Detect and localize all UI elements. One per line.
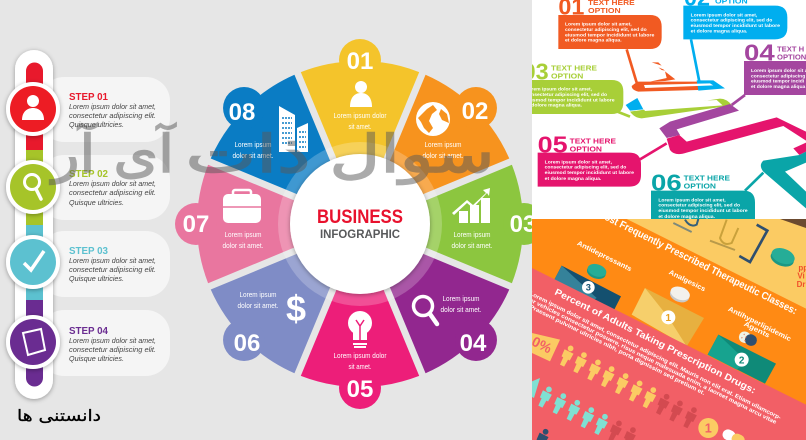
capsule bottom	[722, 429, 745, 440]
numbers: 07	[183, 211, 209, 238]
badge 1: 1	[705, 422, 712, 436]
watermark: آی آر	[49, 122, 177, 185]
option 06: Lorem ipsum dolor sit amet,	[658, 197, 726, 203]
body copy: Praesent pulvinar ultricies nibh, porta dignissim sed pretium et.	[528, 304, 706, 397]
option 06: TEXT HERE	[684, 173, 730, 182]
centre title: INFOGRAPHIC	[320, 227, 400, 241]
segment captions: Lorem ipsum	[454, 230, 490, 239]
segment captions: sit amet.	[348, 122, 372, 131]
text: red fragment: Dr	[797, 280, 806, 289]
option 04: TEXT H	[777, 45, 805, 54]
heading: percent of adults: Percent of Adults Taking Prescription Drugs:	[553, 287, 757, 395]
step 2 text: STEP 02	[69, 169, 108, 180]
icon: growth chart	[452, 188, 490, 223]
centre title: BUSINESS	[317, 207, 403, 228]
label: analgesics: Analgesics	[667, 269, 706, 293]
option 05: eiusmod tempor incididunt ut labore	[545, 170, 634, 176]
option 03	[532, 64, 624, 114]
option 01: OPTION	[588, 6, 621, 15]
timeline coloured bar	[26, 63, 43, 387]
step 4 text: Quisque ultricies.	[69, 354, 124, 363]
chart: business wheel	[175, 39, 545, 409]
label: antidepressants: Antidepressants	[576, 240, 633, 273]
option 04: Lorem ipsum dolor sit a	[751, 68, 806, 74]
option 03: eiusmod tempor incididunt ut labore	[525, 97, 615, 103]
pill teal	[586, 264, 606, 279]
option 05: Lorem ipsum dolor sit amet,	[545, 159, 613, 165]
segment captions: Lorem ipsum	[424, 140, 462, 149]
icon: magnifier	[414, 296, 437, 324]
envelope 2: 2	[739, 355, 745, 366]
numbers	[183, 48, 536, 403]
loop: orange and blue	[632, 80, 725, 92]
option 05: 05	[538, 131, 568, 157]
people row: muted red	[606, 392, 700, 440]
option 06: eiusmod tempor incididunt ut labore	[658, 208, 748, 214]
segment 07	[175, 165, 303, 283]
envelope 1	[632, 288, 704, 346]
segment captions: dolor sit amet.	[232, 151, 274, 160]
body copy: er vehicles consectetur posuere, risus neque malesuada enim, a laoreet magna arcu vitae	[528, 298, 777, 426]
step 2 text: Lorem ipsum dolor sit amet,	[69, 179, 156, 188]
numbers: 01	[347, 48, 373, 75]
option 02: et dolore magna aliqua.	[691, 28, 748, 34]
pill white	[670, 286, 690, 302]
option 06: consectetur adipiscing elit, sed do	[658, 203, 740, 209]
segment captions: Lorem ipsum	[240, 290, 276, 299]
badge 1	[698, 418, 718, 438]
option 03: consectetur adipiscing elit, sed do	[525, 92, 607, 98]
segment captions	[222, 111, 492, 371]
step cards	[40, 77, 170, 376]
label: antihyperlipidemic agents: Antihyperlipidemic	[727, 306, 792, 343]
option 04: et dolore magna aliqua	[751, 84, 806, 90]
segment 01	[301, 39, 419, 167]
loop: purple and magenta	[659, 104, 806, 154]
segment captions: Lorem ipsum dolor	[334, 111, 387, 120]
step 3 text	[69, 246, 156, 283]
translucent ring	[278, 142, 442, 306]
segment 03	[417, 165, 545, 283]
watermark	[49, 122, 494, 185]
banner: percentage: 0%	[529, 333, 555, 357]
option 03: TEXT HERE	[551, 63, 597, 72]
envelope 2	[708, 335, 776, 384]
step 4 text	[69, 326, 156, 363]
option 02: Lorem ipsum dolor sit amet,	[691, 12, 758, 18]
band: coral	[532, 268, 806, 440]
icon: person step 1	[6, 82, 60, 136]
icon: briefcase	[223, 190, 261, 223]
step 1 text: Quisque ultricies.	[69, 120, 124, 129]
option 02: consectetur adipiscing elit, sed do	[691, 18, 772, 24]
segment 02	[358, 51, 533, 226]
icon: buildings	[279, 106, 308, 152]
option 01: consectetur adipiscing elit, sed do	[565, 27, 647, 33]
panel background	[532, 0, 806, 219]
icon: light bulb	[348, 311, 372, 347]
label: antihyperlipidemic agents: Agents	[742, 321, 771, 340]
option 06: et dolore magna aliqua.	[658, 214, 716, 220]
envelope 3: 3	[586, 283, 591, 293]
option 05	[538, 131, 641, 187]
banner: percentage	[529, 333, 560, 361]
option 03: 03	[523, 59, 549, 85]
segment captions: dolor sit amet.	[422, 151, 464, 160]
segment captions: dolor sit amet.	[238, 301, 278, 310]
step 4 text: consectetur adipiscing elit.	[69, 345, 156, 354]
step 2 text: Quisque ultricies.	[69, 198, 124, 207]
panel: prescription drugs	[528, 209, 806, 440]
icon: top dark strip	[780, 219, 806, 228]
option 01: eiusmod tempor incididunt ut labore	[565, 32, 655, 38]
option 01: Lorem ipsum dolor sit amet,	[565, 22, 632, 28]
option 04: consectetur adipiscing	[751, 73, 805, 79]
option 01: et dolore magna aliqua.	[565, 38, 622, 44]
option 02: eiusmod tempor incididunt ut labore	[691, 23, 780, 29]
watermark: ذات	[186, 125, 310, 185]
loop: teal	[761, 143, 806, 208]
step 3 text: Lorem ipsum dolor sit amet,	[69, 256, 156, 265]
icon: globe	[416, 102, 450, 136]
numbers: 04	[460, 330, 487, 357]
step 3 text: consectetur adipiscing elit.	[69, 265, 156, 274]
numbers: 05	[347, 376, 373, 403]
step 3 text: STEP 03	[69, 246, 108, 257]
loop: blue and green	[626, 98, 732, 118]
option 06	[651, 169, 755, 220]
people row: teal	[538, 386, 608, 435]
option 02	[683, 0, 787, 39]
option 03: OPTION	[551, 71, 584, 80]
option 06: 06	[651, 169, 682, 195]
segment 08	[187, 51, 362, 226]
numbers: 08	[229, 99, 255, 126]
step 2 text	[69, 169, 156, 207]
option 05: consectetur adipiscing elit, sed do	[545, 165, 626, 171]
step 1 text: Lorem ipsum dolor sit amet,	[69, 102, 156, 111]
numbers: 06	[234, 330, 260, 357]
segment captions: sit amet.	[348, 362, 372, 371]
option 03: et dolore magna aliqua.	[525, 103, 583, 109]
icon: person	[350, 81, 372, 107]
icon: check step 3	[6, 235, 60, 289]
people row: yellow	[558, 344, 659, 409]
numbers: 02	[462, 98, 488, 125]
icon: dollar: $	[286, 288, 306, 329]
option 04: OPTION	[777, 53, 806, 62]
icon: orange marks	[650, 62, 675, 82]
step 4 text: Lorem ipsum dolor sit amet,	[69, 336, 156, 345]
connector lines	[617, 39, 763, 191]
option 04: eiusmod tempor incidi	[751, 79, 805, 85]
option 01	[558, 0, 662, 49]
segment 05	[301, 281, 419, 409]
option 05: et dolore magna aliqua.	[545, 176, 602, 182]
segment captions: Lorem ipsum dolor	[334, 351, 387, 360]
segment captions: dolor sit amet.	[222, 241, 264, 250]
envelope 1: 1	[666, 313, 672, 324]
capsule	[738, 332, 757, 346]
segment 06	[187, 222, 362, 397]
band: yellow	[626, 219, 806, 309]
centre disc	[290, 154, 430, 294]
option 05: OPTION	[570, 144, 603, 153]
band: orange	[532, 219, 806, 404]
step 1 text	[69, 92, 156, 129]
segment captions: dolor sit amet.	[452, 241, 492, 250]
segment captions: Lorem ipsum	[224, 230, 262, 239]
segment 04	[358, 222, 533, 397]
body copy: Lorem ipsum dolor sit amet, consectetur adipiscing elit. Mauris non elit erat. Etiam ullamcorp-	[528, 291, 782, 421]
text: red fragment	[797, 266, 806, 287]
option 03: Lorem ipsum dolor sit amet,	[525, 87, 593, 93]
numbers: 03	[510, 211, 536, 238]
caption: Persian label: دانستنی ها	[17, 406, 101, 425]
timeline pill	[15, 50, 53, 399]
option 04	[744, 40, 806, 95]
panel: vertical steps	[6, 50, 170, 399]
segment captions: dolor sit amet.	[440, 305, 482, 314]
step 1 text: consectetur adipiscing elit.	[69, 111, 156, 120]
envelope 3	[554, 266, 621, 310]
segment captions: Lorem ipsum	[442, 294, 480, 303]
icon: teal pill top	[770, 248, 795, 267]
option 06: OPTION	[684, 181, 717, 190]
segment captions: Lorem ipsum	[234, 140, 272, 149]
step 2 text: consectetur adipiscing elit.	[69, 188, 156, 197]
icon: bracket	[739, 225, 767, 262]
icon: stethoscope area	[673, 219, 738, 250]
icon: magnifier step 2	[6, 160, 60, 214]
person navy	[536, 428, 548, 440]
watermark: سوال	[330, 125, 494, 185]
step 4 text: STEP 04	[69, 326, 108, 337]
step 1 text: STEP 01	[69, 92, 108, 103]
panel: text options flow	[523, 0, 806, 220]
option 04: 04	[744, 40, 775, 66]
option 05: TEXT HERE	[570, 136, 616, 145]
text: red fragment: Vi	[797, 272, 805, 281]
icon: notebook step 4	[6, 315, 60, 369]
centre title	[317, 207, 403, 241]
step 3 text: Quisque ultricies.	[69, 274, 124, 283]
flag teal	[532, 378, 540, 398]
